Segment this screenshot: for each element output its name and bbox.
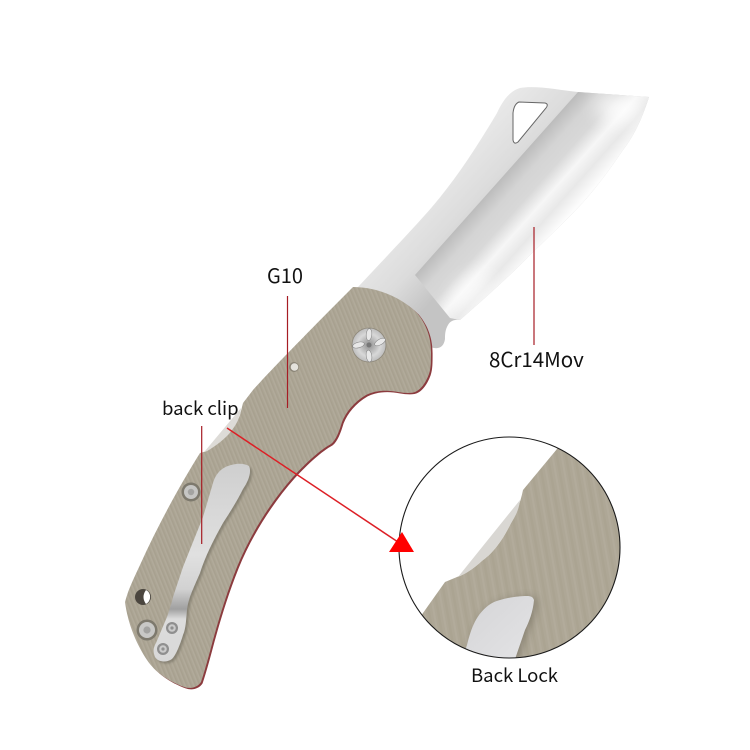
stop pin [289,362,299,372]
arrow to detail circle [227,428,414,552]
lanyard hole handle [135,589,151,605]
lanyard hole [513,102,547,143]
callout line: back clip [201,426,203,544]
zoom handle [422,448,620,658]
label: G10: G10 [267,260,303,289]
blade [358,80,660,348]
screw upper [182,482,200,502]
label: back clip: back clip [162,395,239,421]
knife [125,80,660,689]
pivot screw [352,328,387,362]
blade grind [415,92,649,320]
pocket clip [154,464,252,663]
handle [125,287,433,689]
screw lower [136,620,158,640]
zoom lock tail [458,500,520,577]
clip rivets [157,622,178,655]
callout line: G10 [286,296,288,408]
zoom detail circle [398,436,621,658]
label: 8Cr14Mov: 8Cr14Mov [489,343,584,373]
label: Back Lock: Back Lock [471,662,559,688]
zoom clip [466,594,540,658]
callout line: 8Cr14Mov [533,227,535,345]
back lock blade tail [205,408,241,451]
